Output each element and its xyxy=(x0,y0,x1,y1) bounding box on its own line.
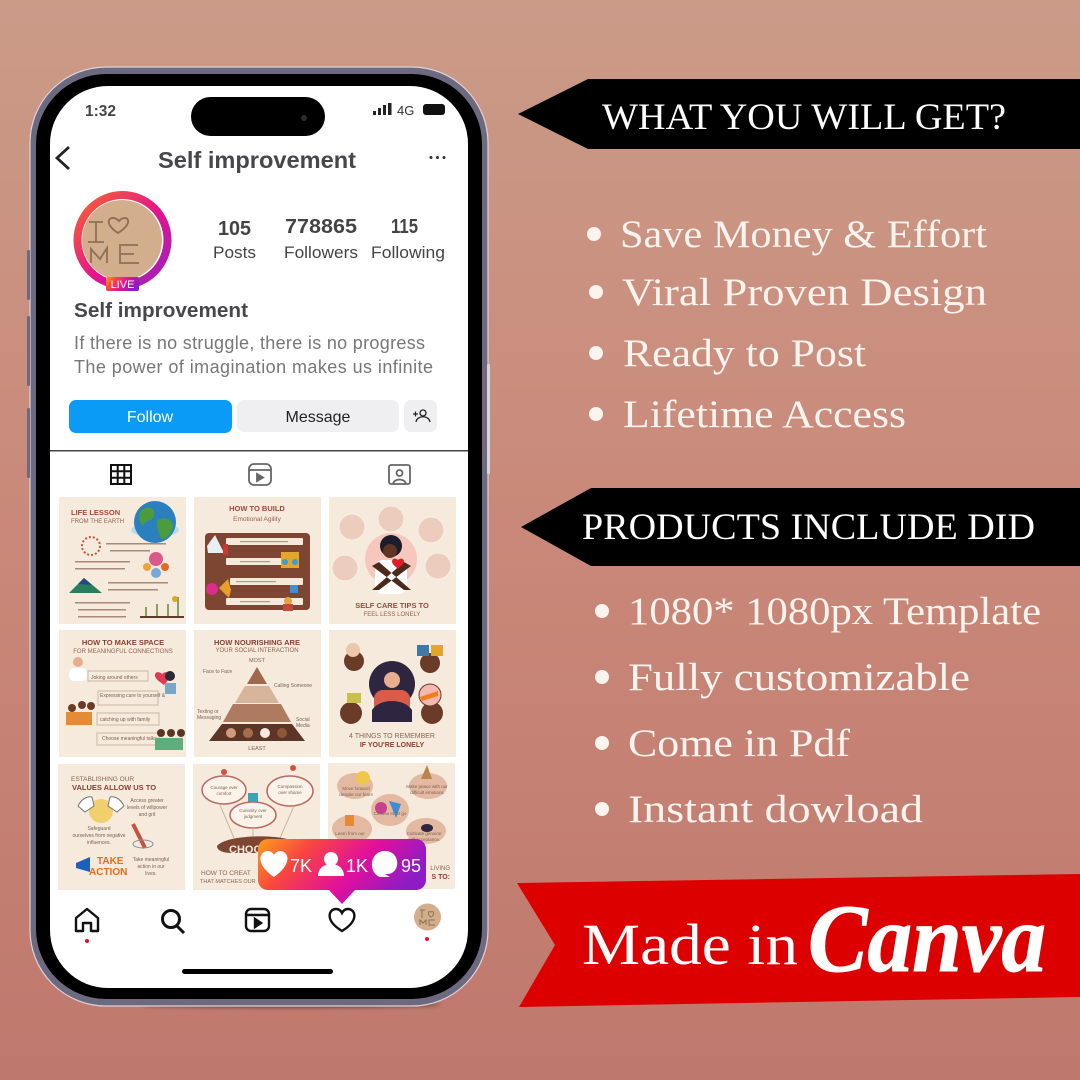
benefits list xyxy=(587,213,987,436)
banner: what you will get: WHAT YOU WILL GET? xyxy=(602,97,1006,138)
post: living: Learn from our xyxy=(335,831,365,836)
post: values: ESTABLISHING OUR xyxy=(71,776,134,783)
status bar xyxy=(85,97,445,136)
post: values: ourselves from negative xyxy=(72,833,126,839)
stats: Posts xyxy=(213,244,256,262)
post: self care tips: FEEL LESS LONELY xyxy=(364,612,420,618)
stats xyxy=(213,216,445,262)
post: choose: Courage over xyxy=(210,785,238,790)
benefits list: Ready to Post xyxy=(623,332,866,375)
post: values xyxy=(58,764,185,890)
profile buttons: Follow xyxy=(127,409,174,426)
post: nourishing pyramid: YOUR SOCIAL INTERACTION xyxy=(215,648,299,654)
post: values: action in our xyxy=(137,864,165,870)
banner: made in canva: Made in xyxy=(582,912,798,977)
tabs xyxy=(111,464,410,485)
bio: Self improvement xyxy=(74,300,248,322)
post: living: Move forward xyxy=(342,786,370,791)
post: nourishing pyramid: Face to Face xyxy=(203,669,232,675)
bottom navigation xyxy=(76,904,441,933)
post: choose xyxy=(193,764,320,890)
post: values: TAKE xyxy=(97,856,124,867)
post: choose: HOW TO CREAT xyxy=(201,870,251,877)
status bar: 1:32 xyxy=(85,103,116,120)
avatar: LIVE xyxy=(111,279,134,291)
benefits list: Lifetime Access xyxy=(623,393,906,436)
post: values: influences. xyxy=(87,840,111,846)
post: make space: HOW TO MAKE SPACE xyxy=(82,638,164,647)
post: make space xyxy=(59,630,186,757)
post: values: Access greater xyxy=(130,798,164,804)
profile header xyxy=(57,147,446,173)
post: living: self acceptance. xyxy=(408,837,440,842)
post: living: LIVING xyxy=(430,866,450,872)
post: choose: comfort xyxy=(216,791,232,796)
bio xyxy=(74,300,433,377)
post: choose: THAT MATCHES OUR xyxy=(200,879,256,885)
stats: 115 xyxy=(391,216,418,238)
post: nourishing pyramid xyxy=(194,630,321,757)
product list xyxy=(595,590,1041,831)
post: nourishing pyramid: Social xyxy=(296,717,310,723)
divider xyxy=(50,450,468,452)
post: make space: Joking around others xyxy=(91,675,138,681)
engagement badge: 7K xyxy=(290,856,312,876)
post: values: levels of willpower xyxy=(127,805,167,811)
stats: 778865 xyxy=(285,216,357,238)
profile buttons: Message xyxy=(286,409,351,426)
phone shadow xyxy=(140,1002,440,1006)
post: living: Cultivate genuine xyxy=(407,831,442,836)
post: nourishing pyramid: HOW NOURISHING ARE xyxy=(214,638,300,647)
profile buttons xyxy=(69,400,437,433)
profile header: Self improvement xyxy=(158,147,356,173)
stats: Followers xyxy=(284,244,358,262)
benefits list: Save Money & Effort xyxy=(620,213,987,256)
post: make space: Expressing care to yourself & xyxy=(100,693,166,699)
post: make space: catching up with family xyxy=(100,717,151,723)
post: living: Make peace with our xyxy=(406,784,448,789)
post: living: Choose to let go xyxy=(374,811,407,816)
stats: Following xyxy=(371,244,445,262)
post: self care tips xyxy=(329,497,456,624)
banner: made in canva xyxy=(517,874,1080,1007)
post: living: difficult emotions xyxy=(410,790,444,795)
post: nourishing pyramid: Messaging xyxy=(197,715,221,721)
post: choose: CHOO xyxy=(229,844,262,856)
avatar xyxy=(78,195,168,291)
home indicator xyxy=(182,969,333,974)
post: nourishing pyramid: Media xyxy=(296,723,310,729)
post: nourishing pyramid: MOST xyxy=(249,658,266,664)
post: life lesson: FROM THE EARTH xyxy=(71,519,124,525)
bio: The power of imagination makes us infinite xyxy=(74,357,433,377)
notification dots xyxy=(85,937,429,943)
post: nourishing pyramid: Texting or xyxy=(197,709,219,715)
post: life lesson xyxy=(59,497,186,624)
post: things to remember xyxy=(329,630,456,757)
post: choose: Compassion xyxy=(277,784,303,789)
post: make space: Choose meaningful talks xyxy=(102,736,157,742)
post: choose: Curiosity over xyxy=(239,808,267,813)
product list: Instant dowload xyxy=(628,788,924,831)
engagement badge: 1K xyxy=(346,856,368,876)
banner: products include xyxy=(521,488,1080,566)
post: values: ACTION xyxy=(89,867,127,878)
bio: If there is no struggle, there is no progress xyxy=(74,333,425,353)
product list: Fully customizable xyxy=(628,656,970,699)
post: choose: judgment xyxy=(243,814,263,819)
post: values: VALUES ALLOW US TO xyxy=(72,783,156,792)
benefits list: Viral Proven Design xyxy=(622,271,987,314)
product list: Come in Pdf xyxy=(628,722,850,765)
post: self care tips: SELF CARE TIPS TO xyxy=(355,601,429,610)
post: living xyxy=(328,763,455,889)
post: emotional agility: HOW TO BUILD xyxy=(229,504,285,513)
post: living: despite our fears xyxy=(339,792,374,797)
post: make space: FOR MEANINGFUL CONNECTIONS xyxy=(73,649,173,655)
post: emotional agility: Emotional Agility xyxy=(233,516,282,523)
post: choose: over shame xyxy=(278,790,302,795)
post: values: and grit xyxy=(139,812,156,818)
post: values: Take meaningful xyxy=(133,857,169,863)
post: life lesson: LIFE LESSON xyxy=(71,508,120,517)
post: values: Safeguard xyxy=(87,826,111,832)
post: things to remember: IF YOU'RE LONELY xyxy=(360,742,424,749)
banner: made in canva: Canva xyxy=(808,885,1046,992)
post: living: S TO: xyxy=(431,874,450,881)
post: nourishing pyramid: Calling Someone xyxy=(274,683,312,689)
post: nourishing pyramid: LEAST xyxy=(248,746,266,752)
phone mockup xyxy=(27,67,490,1006)
banner: what you will get xyxy=(518,79,1080,149)
post: values: lives. xyxy=(145,871,157,877)
thumbnail grid xyxy=(58,497,456,890)
post: emotional agility xyxy=(194,497,321,624)
banner: products include: PRODUCTS INCLUDE DID xyxy=(582,507,1035,548)
post: things to remember: 4 THINGS TO REMEMBER xyxy=(349,733,435,740)
stats: 105 xyxy=(218,218,251,240)
engagement badge: 95 xyxy=(401,856,421,876)
product list: 1080* 1080px Template xyxy=(628,590,1041,633)
status bar: 4G xyxy=(397,103,414,118)
engagement badge xyxy=(258,839,426,904)
